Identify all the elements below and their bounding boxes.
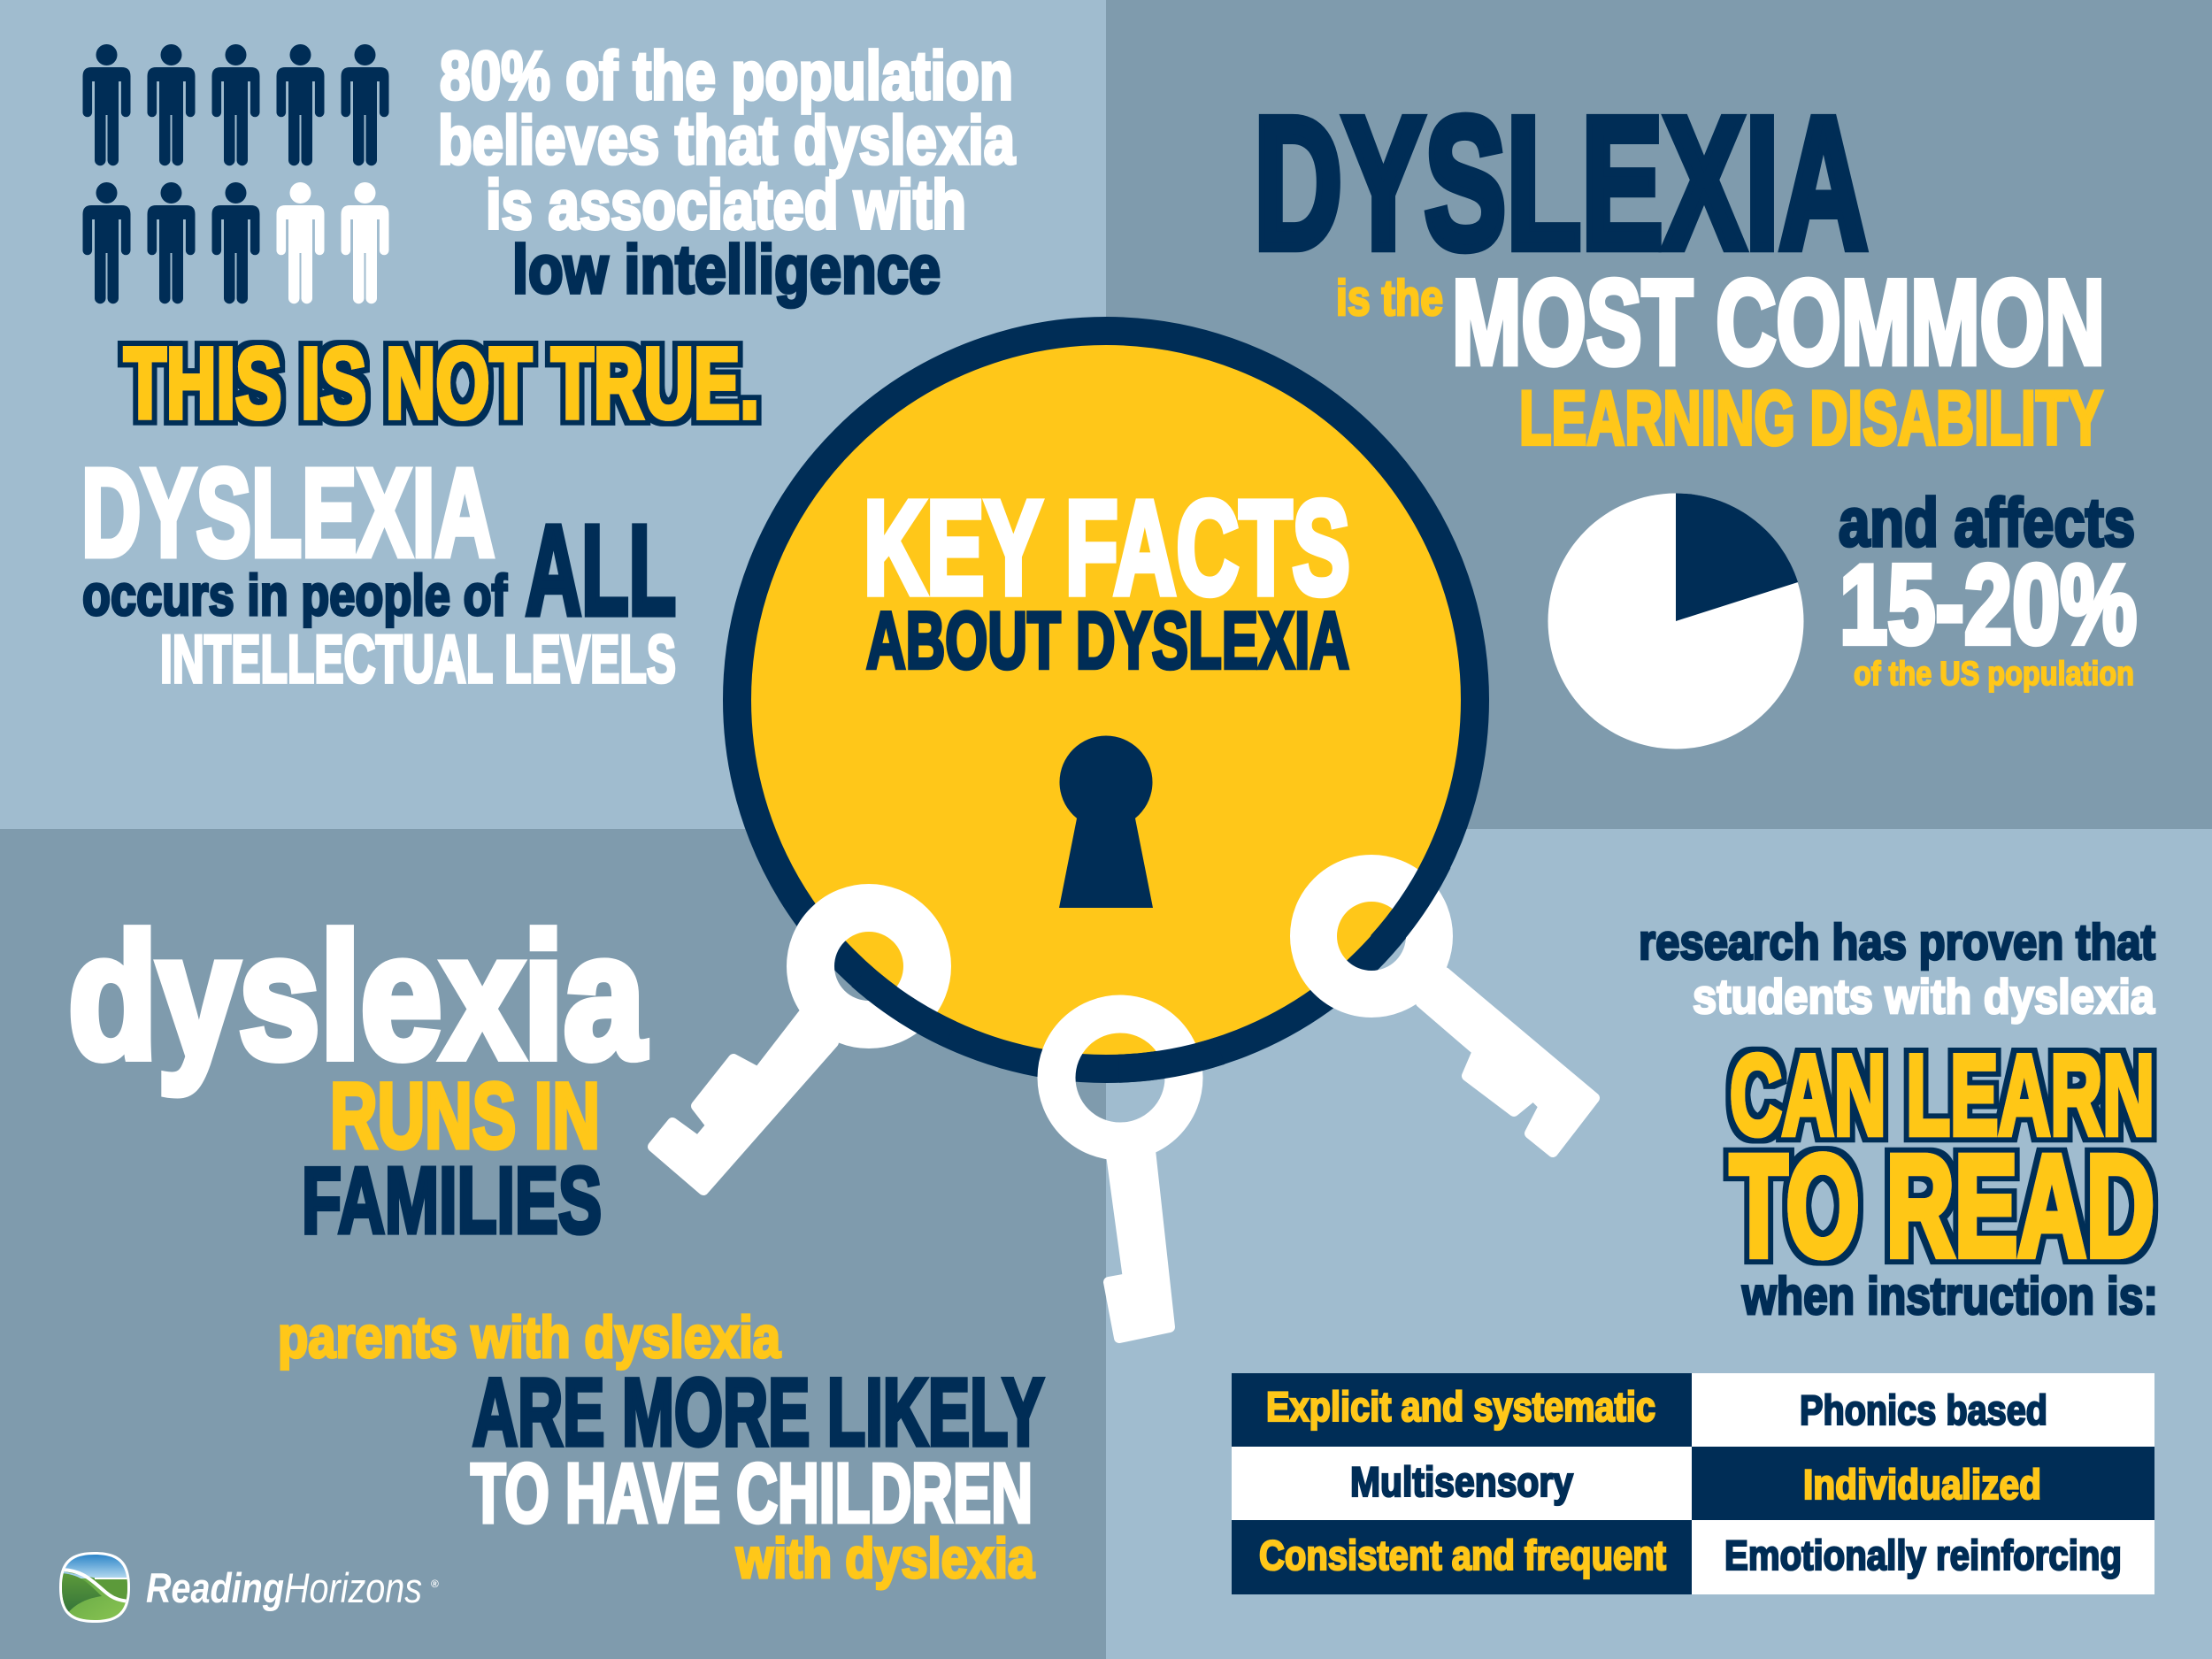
text block: research can learn to read xyxy=(1639,914,2158,1325)
text block: all intellectual levels xyxy=(81,442,676,697)
icon: keyhole xyxy=(1059,736,1153,908)
text block: all intellectual levels: INTELLECTUAL LEVELS xyxy=(160,622,676,697)
panel: bottom-right background xyxy=(1106,829,2212,1659)
text block: runs in families xyxy=(68,898,646,1253)
text block: 80% belief xyxy=(438,38,1016,308)
circle: yellow lock face xyxy=(737,331,1475,1069)
text block: all intellectual levels: ALL xyxy=(526,499,676,641)
text block: research can learn to read: students with dyslexia xyxy=(1693,969,2154,1024)
text block: parents more likely: TO HAVE CHILDREN xyxy=(471,1447,1033,1540)
table: instruction qualities: Individualized xyxy=(1803,1461,2041,1508)
icon: left key xyxy=(653,908,927,1190)
pie chart: 15-20% xyxy=(1548,493,1803,749)
text block: 80% belief: low intelligence xyxy=(512,232,941,308)
text block: 80% belief: believes that dyslexia xyxy=(438,103,1016,179)
table: instruction qualities: Consistent and frequent xyxy=(1259,1532,1666,1578)
logo: Reading Horizons: ReadingHorizons xyxy=(146,1564,422,1611)
text block: 80% belief: is associated with xyxy=(486,165,966,243)
text block: parents more likely xyxy=(278,1304,1044,1590)
logo: Reading Horizons xyxy=(59,1552,439,1623)
text block: runs in families: FAMILIES xyxy=(302,1148,602,1253)
table: instruction qualities xyxy=(1232,1373,2154,1594)
text block: runs in families: RUNS IN xyxy=(330,1064,600,1168)
text block: affects 15-20%: and affects xyxy=(1839,485,2135,561)
heading: key facts about dyslexia: KEY FACTS xyxy=(864,472,1350,622)
text block: all intellectual levels: occurs in people of xyxy=(82,563,507,627)
callout: this is not true: THIS IS NOT TRUE. xyxy=(124,327,759,439)
icon: middle key xyxy=(1056,1014,1184,1338)
text block: parents more likely: with dyslexia xyxy=(735,1528,1035,1590)
pictogram: 8 of 10 people xyxy=(83,44,389,303)
text block: most common learning disability xyxy=(1254,78,2105,461)
logo: Reading Horizons: ® xyxy=(431,1578,439,1590)
text block: affects 15-20% xyxy=(1839,485,2137,693)
icon: right key xyxy=(1313,878,1594,1152)
text block: most common learning disability: DYSLEXIA xyxy=(1254,78,1868,288)
text block: 80% belief: 80% of the population xyxy=(440,38,1013,114)
rim segments threading through key rings xyxy=(861,862,1438,1069)
panel: top-right background xyxy=(1106,0,2212,829)
table: instruction qualities: Emotionally reinforcing xyxy=(1724,1532,2122,1578)
text block: affects 15-20%: of the US population xyxy=(1854,656,2134,693)
text block: parents more likely: parents with dyslexia xyxy=(278,1304,781,1370)
table: instruction qualities: Explicit and systematic xyxy=(1266,1383,1655,1430)
heading: key facts about dyslexia xyxy=(864,472,1350,686)
heading: key facts about dyslexia: ABOUT DYSLEXIA xyxy=(866,596,1349,686)
text block: most common learning disability: is the xyxy=(1336,270,1443,326)
text block: runs in families: dyslexia xyxy=(68,898,646,1095)
text block: parents more likely: ARE MORE LIKELY xyxy=(472,1358,1044,1465)
panel: top-left background xyxy=(0,0,1106,829)
table: instruction qualities: Phonics based xyxy=(1800,1386,2047,1433)
text block: all intellectual levels: DYSLEXIA xyxy=(81,442,495,582)
table: instruction qualities: Multisensory xyxy=(1350,1458,1573,1505)
panel: bottom-left background xyxy=(0,829,1106,1659)
